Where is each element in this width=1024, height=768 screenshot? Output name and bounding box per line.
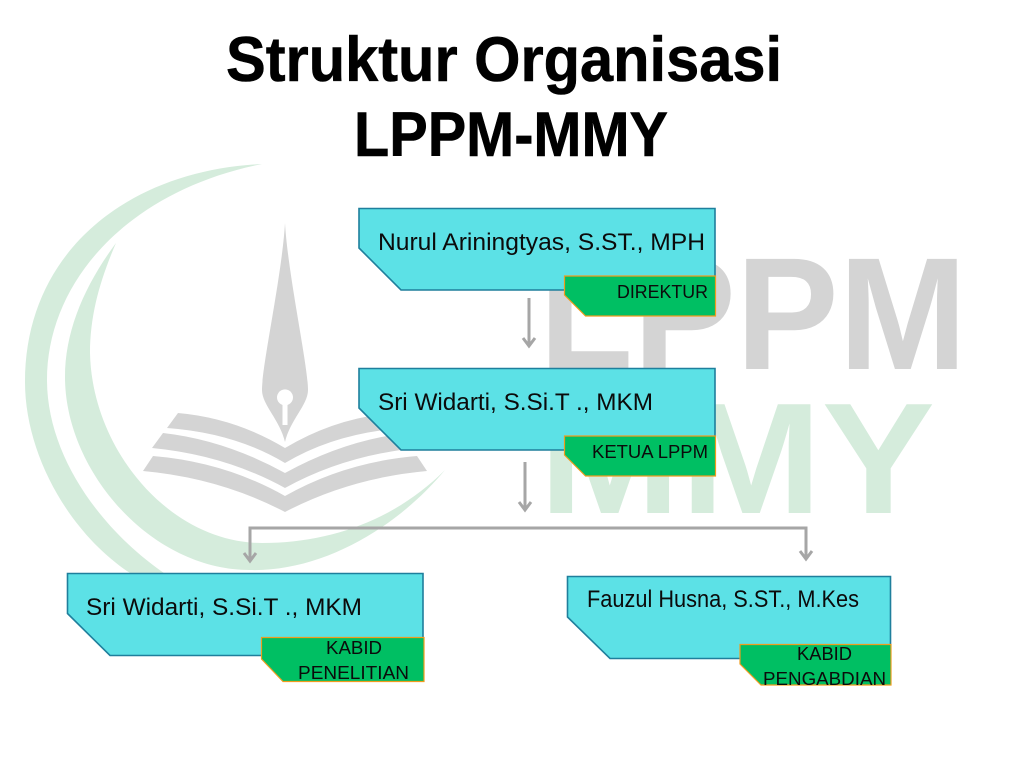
panel: direktur: Nurul Ariningtyas, S.ST., MPH (378, 229, 705, 256)
icon: pen nib (262, 223, 308, 442)
title: LPPM-MMY (354, 100, 668, 170)
panel: kabid pengabdian: PENGABDIAN (763, 669, 886, 689)
watermark text: MMY: MMY (539, 371, 935, 547)
connector: branch to two kabid boxes (244, 528, 812, 561)
panel: ketua lppm (359, 368, 716, 476)
watermark text: LPPM: LPPM (539, 224, 967, 403)
panel: kabid pengabdian: KABID (797, 644, 852, 664)
panel: kabid penelitian: PENELITIAN (298, 663, 409, 683)
title: Struktur Organisasi (226, 25, 782, 95)
background logo watermark (25, 164, 967, 575)
panel: ketua lppm: KETUA LPPM (592, 442, 708, 462)
crescent: outer band (25, 164, 262, 575)
arrow: direktur to ketua (523, 298, 535, 346)
crescent: inner band (65, 243, 445, 570)
panel: ketua lppm: Sri Widarti, S.Si.T ., MKM (378, 389, 653, 416)
icon: open book (143, 413, 427, 512)
arrow: ketua to kabid connector (519, 462, 531, 510)
panel: kabid penelitian (68, 574, 424, 683)
panel: direktur (359, 208, 716, 316)
panel: kabid pengabdian: Fauzul Husna, S.ST., M.Kes (587, 586, 859, 613)
title (226, 25, 782, 170)
panel: kabid penelitian: Sri Widarti, S.Si.T ., MKM (86, 594, 362, 621)
panel: direktur: DIREKTUR (617, 282, 708, 302)
panel: kabid penelitian: KABID (326, 638, 382, 658)
panel: kabid pengabdian (568, 576, 891, 689)
